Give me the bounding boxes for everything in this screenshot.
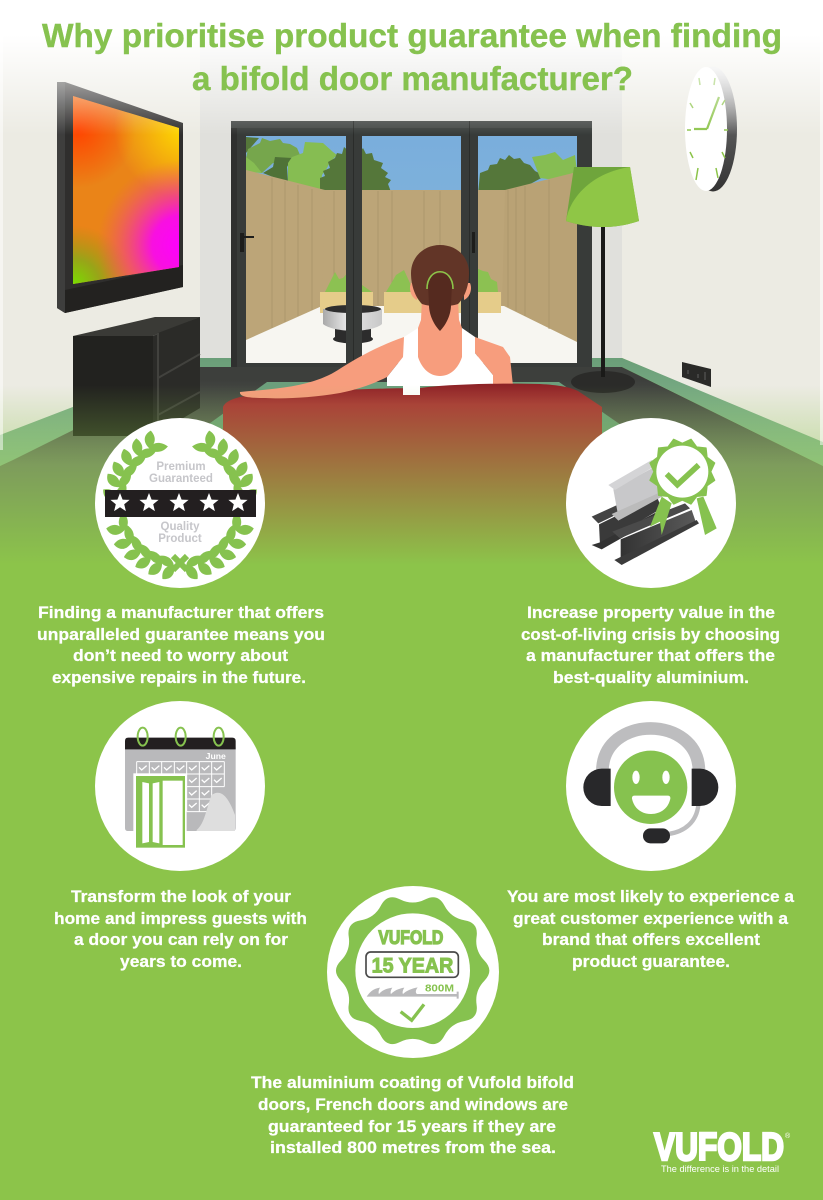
hair band bbox=[427, 272, 453, 289]
floor lamp bbox=[566, 167, 639, 393]
rosette bbox=[650, 439, 717, 535]
icon: smiling customer service headset bbox=[566, 701, 736, 871]
laurel wreath bbox=[102, 427, 258, 581]
hair bbox=[411, 245, 469, 306]
title bbox=[42, 17, 782, 97]
date grid bbox=[137, 762, 224, 812]
badge wording: Product bbox=[158, 533, 202, 545]
title: Why prioritise product guarantee when finding bbox=[42, 17, 782, 54]
logo: vufold: VUFOLD bbox=[654, 1126, 784, 1169]
clock hands and ticks bbox=[687, 78, 728, 180]
wreath crossed stems bbox=[173, 556, 187, 570]
tv screen bbox=[73, 96, 179, 286]
text: property value paragraph: Increase property value in the bbox=[527, 604, 775, 622]
door handles bbox=[240, 232, 475, 253]
wall socket bbox=[682, 362, 711, 387]
text: property value paragraph: a manufacturer that offers the bbox=[526, 647, 775, 665]
back and neck bbox=[418, 298, 462, 376]
sofa bbox=[223, 384, 602, 565]
icon: premium guaranteed badge bbox=[95, 418, 265, 588]
text: aluminium coating paragraph: The aluminium coating of Vufold bifold bbox=[251, 1074, 574, 1092]
scalloped seal bbox=[336, 897, 489, 1044]
bifold door bbox=[231, 121, 592, 367]
ear cups bbox=[583, 769, 718, 806]
badge wording bbox=[149, 461, 213, 545]
badge wording: Guaranteed bbox=[149, 473, 213, 485]
eyes and mouth bbox=[632, 771, 670, 814]
right wall bbox=[622, 0, 823, 443]
dark beam back bbox=[592, 490, 665, 549]
text: aluminium coating paragraph: installed 800 metres from the sea. bbox=[270, 1139, 556, 1157]
fire pit bbox=[323, 305, 382, 344]
skirting boards bbox=[0, 358, 823, 466]
wall clock bbox=[685, 66, 737, 192]
distance ruler bbox=[367, 987, 459, 999]
white vest bbox=[387, 328, 493, 386]
panel: living room scene bbox=[0, 40, 823, 554]
text: property value paragraph: cost-of-living crisis by choosing bbox=[521, 626, 780, 644]
icon: 15 year guarantee seal: 15 YEAR bbox=[372, 955, 453, 978]
text: customer experience paragraph: You are most likely to experience a bbox=[507, 888, 795, 906]
logo: vufold: The difference is in the detail bbox=[661, 1164, 779, 1175]
text: property value paragraph: best-quality aluminium. bbox=[553, 669, 749, 687]
light beam bbox=[608, 460, 665, 521]
badge wording: Quality bbox=[161, 521, 200, 533]
badge wording: Premium bbox=[156, 461, 206, 473]
page curl bbox=[197, 793, 235, 831]
text: transform paragraph: years to come. bbox=[120, 953, 242, 971]
microphone bbox=[643, 828, 670, 843]
text: transform paragraph: a door you can rely on for bbox=[74, 931, 289, 949]
door frame bbox=[231, 121, 592, 367]
text: aluminium coating paragraph: guaranteed for 15 years if they are bbox=[268, 1118, 556, 1136]
text: guarantee paragraph bbox=[37, 604, 325, 687]
binder rings bbox=[138, 728, 224, 746]
left wall bbox=[0, 0, 200, 436]
month label: June bbox=[206, 751, 226, 761]
text: aluminium coating paragraph: doors, French doors and windows are bbox=[258, 1096, 568, 1114]
calendar header bbox=[125, 738, 236, 749]
garden view through the glass bbox=[246, 136, 577, 363]
fade overlays bbox=[0, 384, 823, 604]
bifold door bbox=[133, 773, 187, 849]
calendar body bbox=[125, 745, 236, 831]
ears bbox=[410, 283, 471, 300]
vest hem over sofa bbox=[403, 384, 420, 395]
ponytail bbox=[428, 274, 452, 331]
woman's arm resting on sofa bbox=[240, 337, 404, 398]
mic boom bbox=[668, 805, 698, 834]
check mark bbox=[401, 1004, 424, 1020]
15 year box bbox=[366, 952, 458, 977]
text: property value paragraph bbox=[521, 604, 780, 687]
icon: 15 year guarantee seal bbox=[327, 886, 499, 1058]
face bbox=[614, 751, 687, 824]
text: transform paragraph: Transform the look of your bbox=[71, 888, 292, 906]
text: customer experience paragraph: product guarantee. bbox=[572, 953, 730, 971]
800m label: 800M bbox=[425, 984, 454, 995]
tv stand bbox=[73, 317, 200, 436]
title: a bifold door manufacturer? bbox=[192, 60, 633, 97]
back wall bbox=[200, 0, 622, 360]
text: guarantee paragraph: expensive repairs in the future. bbox=[52, 669, 306, 687]
star band bbox=[105, 490, 256, 517]
text: customer experience paragraph: great customer experience with a bbox=[513, 910, 789, 928]
floor bbox=[0, 367, 823, 600]
five stars bbox=[110, 493, 248, 511]
text: transform paragraph bbox=[54, 888, 307, 971]
text: transform paragraph: home and impress guests with bbox=[54, 910, 307, 928]
dark beam front bbox=[612, 503, 699, 565]
text: customer experience paragraph: brand that offers excellent bbox=[542, 931, 761, 949]
text: guarantee paragraph: unparalleled guarantee means you bbox=[37, 626, 325, 644]
text: customer experience paragraph bbox=[507, 888, 795, 971]
vufold wordmark: VUFOLD bbox=[378, 928, 443, 949]
woman on sofa bbox=[387, 245, 513, 386]
television bbox=[57, 82, 183, 313]
rug bbox=[170, 382, 660, 452]
text: guarantee paragraph: Finding a manufacturer that offers bbox=[38, 604, 324, 622]
shoulder bbox=[475, 337, 513, 386]
text: aluminium coating paragraph bbox=[251, 1074, 574, 1157]
headband bbox=[602, 728, 699, 772]
icon: steel beams with rosette bbox=[566, 418, 736, 588]
icon: calendar with bifold door bbox=[95, 701, 265, 871]
logo: vufold: ® bbox=[785, 1132, 791, 1140]
text: guarantee paragraph: don’t need to worry about bbox=[73, 647, 289, 665]
